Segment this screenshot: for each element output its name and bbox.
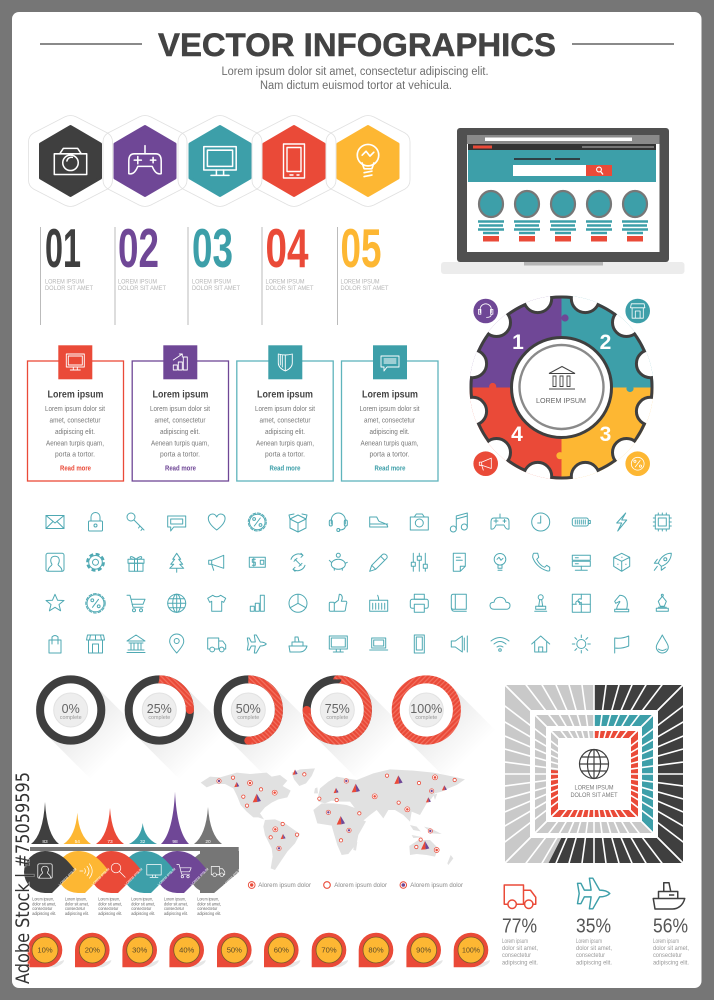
icon: game controller <box>491 514 509 529</box>
icon: battery <box>572 518 590 526</box>
icon: bar chart <box>250 595 264 611</box>
ship stat: 56% <box>653 916 688 938</box>
pin 70%: 70% <box>321 946 337 955</box>
column 04: DOLOR SIT AMET <box>266 285 314 292</box>
legend item 3: Alorem ipsum dolor <box>410 882 464 889</box>
icon: headset badge <box>473 299 498 323</box>
donut 25%: 25% <box>147 702 172 716</box>
product 1 <box>478 191 504 242</box>
hexagon 2: game controller <box>103 116 187 206</box>
icon: thumbs up <box>329 594 347 611</box>
column 05: 05 <box>340 217 382 279</box>
icon: bulb <box>494 554 506 570</box>
column 01: DOLOR SIT AMET <box>45 285 93 292</box>
icon: shoe <box>370 517 388 527</box>
peak values: 54 <box>75 839 80 845</box>
segment captions: Lorem ipsum, <box>131 896 153 902</box>
card 3: adipiscing elit. <box>265 429 305 436</box>
donut 75% <box>303 679 407 780</box>
card 2: adipiscing elit. <box>160 429 200 436</box>
card 1: porta a tortor. <box>55 452 95 459</box>
icon: envelope <box>46 516 64 528</box>
ribbon strip <box>30 847 239 893</box>
gear numbers: 1 <box>512 331 524 354</box>
pin 80%: 80% <box>368 946 384 955</box>
card 2: Read more <box>165 466 196 472</box>
icon: flag <box>615 636 629 653</box>
peak chart with arrow ribbon <box>24 792 243 917</box>
segment captions: dolor sit amet, <box>98 901 122 907</box>
inner band <box>551 731 638 817</box>
icon: open box <box>289 514 307 532</box>
truck stat: 77% <box>502 916 537 938</box>
product 3 <box>550 191 576 242</box>
icon: sun <box>572 635 590 653</box>
chart label: LOREM IPSUM <box>574 784 614 792</box>
card 2: Lorem ipsum dolor sit <box>150 406 210 413</box>
segment 5 <box>156 851 210 893</box>
ship stat: consectetur <box>653 952 683 959</box>
column 01 <box>40 217 93 325</box>
segment captions: adipiscing elit. <box>131 911 155 917</box>
donut 0%: complete <box>60 715 82 721</box>
column 02: 02 <box>118 217 159 279</box>
transport stats <box>502 878 689 966</box>
icon: gear <box>87 554 104 571</box>
segment captions: Lorem ipsum, <box>164 896 186 902</box>
plane stat: 35% <box>576 916 611 938</box>
icon: percent badge <box>248 513 266 531</box>
icon: server <box>572 555 590 570</box>
column 04: 04 <box>266 217 309 279</box>
card 1: Lorem ipsum <box>48 388 104 400</box>
product 4 <box>586 191 612 242</box>
column 03: 03 <box>192 217 233 279</box>
column 03: DOLOR SIT AMET <box>192 285 240 292</box>
legend item 2: Alorem ipsum dolor <box>334 882 388 889</box>
column 02 <box>115 217 166 325</box>
icon: clock <box>532 513 550 531</box>
segment captions: Lorem ipsum, <box>197 896 219 902</box>
icon: dice <box>614 553 630 571</box>
subtitle <box>222 66 488 92</box>
peak values: 73 <box>107 839 113 845</box>
truck stat: adipiscing elit. <box>502 959 538 966</box>
segment captions: dolor sit amet, <box>32 901 56 907</box>
numbered columns 01-05 <box>40 217 389 325</box>
icon: key <box>127 513 144 530</box>
column 02: LOREM IPSUM <box>118 278 157 286</box>
pin 10%: 10% <box>37 946 53 955</box>
pin 10% <box>28 933 64 967</box>
icon: lock <box>88 512 102 531</box>
gear puzzle diagram <box>470 296 654 480</box>
donut 100%: complete <box>415 715 437 721</box>
map legend <box>248 882 464 889</box>
gear numbers: 4 <box>511 423 523 446</box>
icon: megaphone <box>209 555 224 570</box>
subtitle: Lorem ipsum dolor sit amet, consectetur adipiscing elit. <box>222 66 488 78</box>
card 1 <box>28 345 124 481</box>
segment captions: dolor sit amet, <box>197 901 221 907</box>
icon: wifi <box>491 638 509 651</box>
peaks <box>31 792 222 844</box>
icon: document <box>453 553 465 571</box>
continents <box>201 768 465 870</box>
column 04: LOREM IPSUM <box>266 278 304 286</box>
segment captions: dolor sit amet, <box>164 901 188 907</box>
card 2: Aenean turpis quam, <box>151 440 209 447</box>
card 1: Aenean turpis quam, <box>46 440 104 447</box>
icon: rocket <box>654 553 671 570</box>
centre hub <box>512 338 612 438</box>
donut 100%: 100% <box>410 702 442 716</box>
pin 80% <box>359 933 395 967</box>
stock watermark vertical text: Adobe Stock | #75059595 <box>12 772 34 984</box>
segment captions: consectetur <box>131 906 152 912</box>
chart label <box>570 784 618 799</box>
column 03 <box>188 217 240 325</box>
pin 50% <box>217 933 253 967</box>
icon: location pin <box>170 634 184 653</box>
pin 30%: 30% <box>132 946 148 955</box>
icon: joystick <box>535 595 547 611</box>
icon: chess knight <box>615 595 629 612</box>
icon: shopping bag <box>49 636 61 653</box>
truck stat: consectetur <box>502 952 532 959</box>
peak values <box>42 839 211 845</box>
world map <box>201 768 465 870</box>
legend item 1: Alorem ipsum dolor <box>258 882 312 889</box>
donut 100% <box>396 679 496 780</box>
progress donuts <box>40 679 496 780</box>
card 2 <box>132 345 228 481</box>
segment 4: LOREM IPSUM <box>157 867 177 887</box>
hexagon icon row <box>28 116 410 206</box>
column 02: DOLOR SIT AMET <box>118 285 166 292</box>
icon: chess bishop <box>656 594 668 611</box>
donut 75%: 75% <box>325 702 350 716</box>
pin 50%: 50% <box>227 946 242 955</box>
pin 20%: 20% <box>85 946 100 955</box>
card 3 <box>237 345 333 481</box>
segment 6: LOREM IPSUM <box>223 867 243 887</box>
gear numbers: 3 <box>600 423 611 446</box>
segment captions: consectetur <box>98 906 119 912</box>
card 4: amet, consectetur <box>364 418 416 425</box>
pin 100% <box>454 933 490 967</box>
segment 2: LOREM IPSUM <box>91 867 111 887</box>
icon: book <box>451 594 466 611</box>
icon: monitor <box>329 636 347 652</box>
ship stat <box>653 883 689 966</box>
segment captions: consectetur <box>197 906 218 912</box>
card 2: amet, consectetur <box>154 418 206 425</box>
card 3: Read more <box>270 466 301 472</box>
icon: printer <box>410 594 428 612</box>
icon: lightning <box>617 513 627 531</box>
segment captions: Lorem ipsum, <box>98 896 120 902</box>
icon: mobile phone <box>414 635 424 653</box>
icon: user portrait <box>46 553 64 571</box>
icon: percent badge <box>625 451 650 476</box>
donut 50%: complete <box>237 715 259 721</box>
hexagon 4: mobile phone <box>252 116 336 206</box>
column 01: 01 <box>45 217 81 279</box>
peak values: 20 <box>205 839 211 845</box>
icon: laptop <box>370 638 388 650</box>
icon: globe <box>168 594 186 612</box>
peak values: 83 <box>42 839 48 845</box>
segment 1 <box>24 851 78 893</box>
segment 3 <box>90 851 144 893</box>
segment captions: consectetur <box>32 906 53 912</box>
donut 25%: complete <box>148 715 170 721</box>
ship stat: Lorem ipsum <box>653 938 679 945</box>
product 2 <box>514 191 540 242</box>
icon: truck <box>208 638 226 652</box>
plane stat <box>576 878 612 966</box>
icon: water drop <box>656 635 668 653</box>
ship stat: dolor sit amet, <box>653 945 689 952</box>
donut 75%: complete <box>326 715 348 721</box>
card 1: Read more <box>60 466 91 472</box>
card 4: Lorem ipsum dolor sit <box>360 406 420 413</box>
icon: speaker <box>451 636 467 652</box>
gear quadrants <box>470 296 654 480</box>
donut 50% <box>218 679 318 780</box>
donut 25% <box>129 679 229 780</box>
icon: puzzle <box>572 594 590 612</box>
icon: store badge <box>625 299 650 323</box>
segment captions: dolor sit amet, <box>65 901 89 907</box>
segment captions <box>32 896 221 917</box>
icon: music notes <box>450 513 467 532</box>
segment captions: adipiscing elit. <box>164 911 188 917</box>
card 4: Read more <box>374 466 406 472</box>
icon: sliders <box>411 553 427 571</box>
chart label: DOLOR SIT AMET <box>570 792 618 799</box>
column 01: LOREM IPSUM <box>45 278 84 286</box>
segment captions: adipiscing elit. <box>197 911 221 917</box>
title: VECTOR INFOGRAPHICS <box>158 27 556 63</box>
hexagon 3: monitor <box>178 116 262 206</box>
icon: camera <box>410 514 428 530</box>
pin 60%: 60% <box>274 946 289 955</box>
card 3: porta a tortor. <box>265 452 305 459</box>
subtitle: Nam dictum euismod tortor at vehicula. <box>260 80 452 92</box>
gear numbers <box>511 331 611 446</box>
outer band <box>505 685 683 863</box>
column 03: LOREM IPSUM <box>192 278 231 286</box>
column 05: LOREM IPSUM <box>340 278 380 286</box>
donut 0%: 0% <box>62 702 80 716</box>
segment 5: LOREM IPSUM <box>190 867 210 887</box>
segment captions: Lorem ipsum, <box>65 896 87 902</box>
column 05 <box>338 217 389 325</box>
pin 90%: 90% <box>416 946 432 955</box>
plane stat: consectetur <box>576 952 606 959</box>
truck stat <box>502 885 538 966</box>
icon: currency exchange <box>291 553 305 571</box>
plane stat: dolor sit amet, <box>576 945 612 952</box>
column 04 <box>262 217 314 325</box>
segment captions: adipiscing elit. <box>32 911 56 917</box>
icon: telephone <box>533 553 550 571</box>
icon: ship <box>289 637 307 652</box>
segment captions: consectetur <box>164 906 184 912</box>
card 4: Lorem ipsum <box>362 388 418 400</box>
card 2: Lorem ipsum <box>152 388 208 400</box>
donut 50%: 50% <box>236 702 261 716</box>
truck stat: dolor sit amet, <box>502 945 538 952</box>
donut 0% <box>40 679 140 780</box>
product 5 <box>622 191 648 242</box>
icon: percent badge large <box>86 594 105 613</box>
icon: gift <box>128 557 144 571</box>
segment icons <box>38 863 225 878</box>
plane stat: Lorem ipsum <box>576 938 602 945</box>
icon: cloud <box>490 597 510 609</box>
segment 1: LOREM IPSUM <box>58 867 78 887</box>
pin 40% <box>169 933 206 967</box>
card 3: Lorem ipsum <box>257 388 313 400</box>
hexagon 1: camera <box>28 116 112 206</box>
pin 20% <box>75 933 111 967</box>
pin 40%: 40% <box>179 946 195 955</box>
pin 30% <box>122 933 159 967</box>
card 4 <box>342 345 438 481</box>
segment 2 <box>57 851 111 893</box>
laptop website mockup <box>441 128 684 274</box>
icon grid <box>46 512 671 653</box>
card 4: Aenean turpis quam, <box>360 440 419 447</box>
card 3: Lorem ipsum dolor sit <box>255 406 315 413</box>
icon: shopping cart <box>127 595 145 612</box>
icon: piggy bank <box>329 553 347 570</box>
map markers <box>217 770 456 852</box>
segment 3: LOREM IPSUM <box>124 867 144 887</box>
segment 6 <box>189 851 243 893</box>
radial square chart <box>505 685 683 863</box>
title block <box>40 27 674 92</box>
column 05: DOLOR SIT AMET <box>340 285 389 292</box>
centre hub: LOREM IPSUM <box>536 396 586 405</box>
feature cards <box>28 345 438 481</box>
plane stat: adipiscing elit. <box>576 959 612 966</box>
peak values: 32 <box>140 839 146 845</box>
pin 100%: 100% <box>462 948 480 954</box>
pin 60% <box>264 933 300 967</box>
segment captions: adipiscing elit. <box>98 911 122 917</box>
icon: bank <box>127 635 145 652</box>
icon: chip <box>653 513 671 531</box>
hexagon 5: light bulb <box>326 116 410 206</box>
gear numbers: 2 <box>600 331 611 354</box>
icon: t-shirt <box>208 595 226 611</box>
card 2: porta a tortor. <box>160 452 200 459</box>
truck stat: Lorem ipsum <box>502 938 528 945</box>
icon: star <box>46 594 64 611</box>
icon: megaphone badge <box>473 451 498 476</box>
segment captions: adipiscing elit. <box>65 911 89 917</box>
card 3: amet, consectetur <box>260 418 311 425</box>
pin 90% <box>406 933 443 967</box>
icon: headset <box>329 513 347 532</box>
icon: cash <box>249 557 265 567</box>
icon: tree <box>170 553 184 572</box>
icon: pie chart <box>289 594 307 612</box>
peak values: 98 <box>172 839 178 845</box>
icon: pencil <box>370 554 387 571</box>
segment captions: consectetur <box>65 906 85 912</box>
icon: airplane <box>247 635 266 653</box>
card 3: Aenean turpis quam, <box>256 440 314 447</box>
icon: keyboard <box>370 595 388 611</box>
icon: chat bubble <box>168 516 186 531</box>
card 1: Lorem ipsum dolor sit <box>45 406 105 413</box>
middle band <box>535 715 653 833</box>
segment captions: Lorem ipsum, <box>32 896 54 902</box>
ship stat: adipiscing elit. <box>653 959 689 966</box>
card 4: porta a tortor. <box>370 452 410 459</box>
card 4: adipiscing elit. <box>370 429 410 436</box>
card 1: amet, consectetur <box>50 418 101 425</box>
pin 70% <box>312 933 348 967</box>
percentage pins <box>28 933 490 967</box>
icon: home <box>532 636 550 652</box>
icon: heart <box>208 514 225 530</box>
icon: store <box>86 635 104 653</box>
icon: globe <box>580 750 608 778</box>
segment captions: dolor sit amet, <box>131 901 155 907</box>
card 1: adipiscing elit. <box>55 429 95 436</box>
segment 4 <box>123 851 177 893</box>
